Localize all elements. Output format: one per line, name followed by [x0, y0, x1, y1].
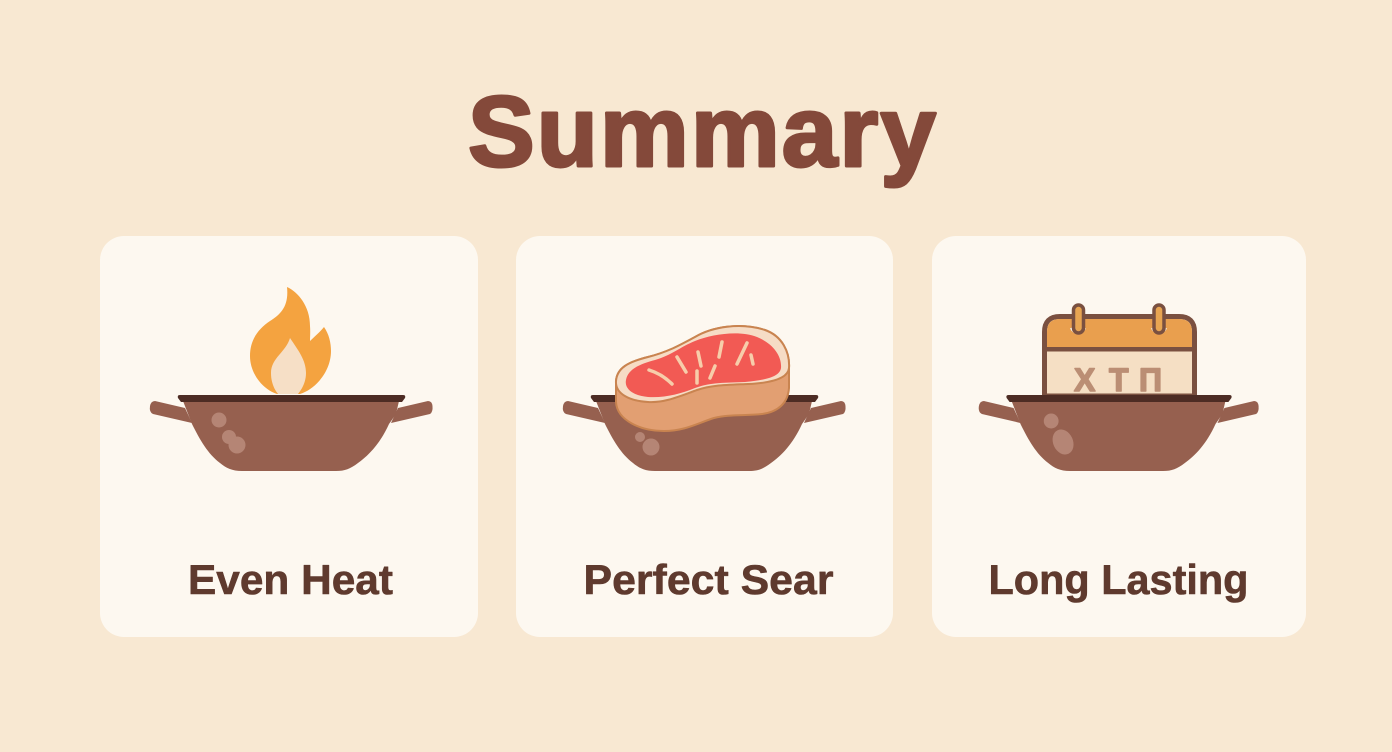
label: even heat: Even Heat — [188, 556, 393, 603]
panel: even heat — [100, 236, 478, 637]
icon: wok — [150, 395, 433, 471]
calendar glyphs: X — [1074, 362, 1096, 398]
panel: long lasting — [932, 236, 1306, 637]
icon: steak — [616, 326, 789, 431]
calendar glyphs: П — [1139, 362, 1162, 398]
icon: flame — [250, 287, 331, 394]
calendar glyphs: T — [1109, 362, 1129, 398]
icon: calendar — [1044, 305, 1195, 398]
label: long lasting: Long Lasting — [988, 556, 1248, 603]
icon: wok — [563, 395, 846, 471]
panel: perfect sear — [516, 236, 893, 637]
icon: wok — [979, 395, 1259, 471]
label: perfect sear: Perfect Sear — [584, 556, 834, 603]
title: Summary — [468, 76, 936, 188]
